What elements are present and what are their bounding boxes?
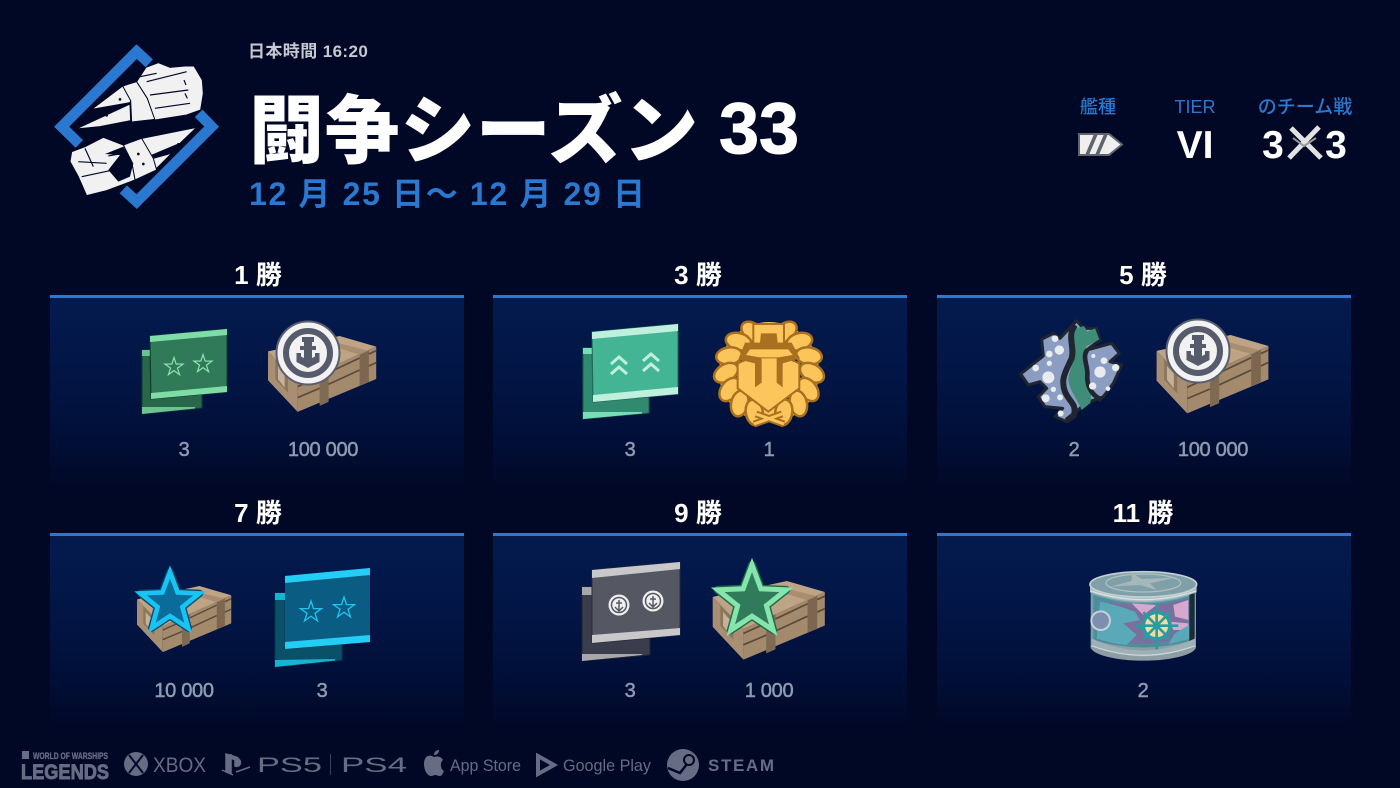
heading: 11 勝: [1113, 498, 1173, 528]
panel: 1 win: [50, 260, 464, 488]
amount: credits: 1 000: [745, 680, 793, 702]
amount: credits: 100 000: [288, 439, 358, 461]
title: 闘争シーズン: [249, 89, 699, 173]
label: tier: TIER: [1174, 97, 1216, 117]
panel: 11 wins: [937, 498, 1351, 726]
logo: App Store: [424, 750, 521, 776]
amount: containers: 2: [1138, 680, 1149, 702]
icon: crossed swords: [1289, 127, 1321, 158]
platform logos: [21, 749, 774, 784]
icon: container drum: [1090, 572, 1197, 661]
logo: Google Play: Google Play: [563, 756, 651, 775]
amount: flags: 3: [625, 439, 636, 461]
emblem: crossed gauntlets in blue diamond: [62, 52, 212, 202]
date range: 12 月 25 日〜 12 月 29 日: [249, 176, 647, 212]
icon: green star flags: [142, 329, 227, 414]
battle info: [1079, 96, 1352, 167]
team size: 3: [1262, 124, 1284, 167]
icon: gold laurel shield: [710, 317, 828, 427]
icon: blue star flags: [275, 568, 370, 667]
tier value: VI: [1177, 124, 1213, 167]
icon: ship class: [1079, 134, 1122, 155]
logo: PS5 and PS4: PS5: [257, 754, 322, 777]
panel: 9 wins: [493, 498, 907, 726]
team size: [1262, 124, 1347, 167]
panel: 7 wins: [50, 498, 464, 726]
heading: 7 勝: [234, 498, 282, 528]
logo: Steam: STEAM: [708, 756, 774, 775]
logo: Legends: [21, 751, 109, 784]
title: 33: [719, 89, 799, 169]
amount: credits: 100 000: [1178, 439, 1248, 461]
logo: App Store: App Store: [450, 756, 521, 775]
icon: crate with anchor medal: [1157, 320, 1268, 413]
icon: grey anchor flags: [582, 562, 680, 661]
amount: credits: 10 000: [154, 680, 214, 702]
amount: flags: 3: [625, 680, 636, 702]
logo: Legends: LEGENDS: [21, 761, 109, 784]
amount: camouflage: 2: [1069, 439, 1080, 461]
logo: Steam: [667, 749, 774, 781]
label: ship class: 艦種: [1080, 97, 1116, 117]
amount: flags: 3: [179, 439, 190, 461]
icon: crate with blue star: [137, 572, 231, 652]
amount: flags: 3: [317, 680, 328, 702]
heading: 9 勝: [674, 498, 722, 528]
icon: camouflage patch: [1021, 321, 1122, 422]
heading: 3 勝: [674, 260, 722, 290]
icon: teal chevron flags: [583, 324, 678, 419]
team size: 3: [1325, 124, 1347, 167]
icon: crate with green star: [713, 565, 825, 660]
heading: 5 勝: [1119, 260, 1167, 290]
amount: medal: 1: [764, 439, 775, 461]
logo: Xbox: [124, 752, 206, 777]
logo: PS5 and PS4: [222, 754, 408, 777]
heading: 1 勝: [234, 260, 282, 290]
panel: 5 wins: [937, 260, 1351, 488]
icon: crate with anchor medal: [268, 322, 376, 412]
logo: Legends: WORLD OF WARSHIPS: [33, 751, 108, 761]
panel: 3 wins: [493, 260, 907, 488]
logo: PS5 and PS4: PS4: [341, 754, 408, 777]
label: team battle: のチーム戦: [1258, 96, 1352, 118]
logo: Xbox: XBOX: [153, 754, 206, 777]
time label: 日本時間 16:20: [248, 42, 368, 61]
